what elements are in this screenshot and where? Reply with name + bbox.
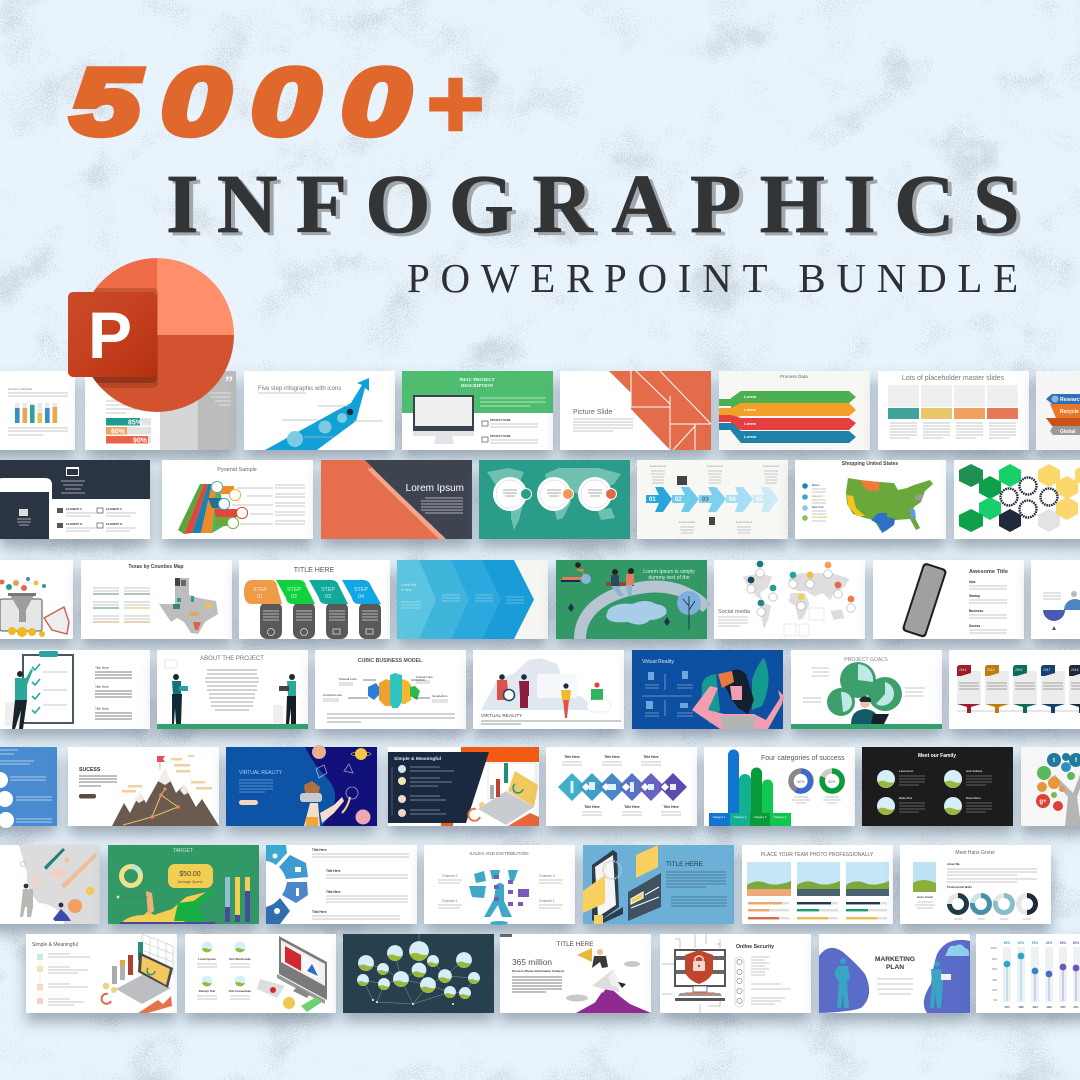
slide: iMac project description: IMAC PROJECT (459, 377, 495, 382)
slide: timeline 2014-2018: 2015 (987, 668, 995, 672)
slide: awesome title phone: Awesome Title (969, 569, 1008, 575)
slide: virtual reality space (226, 745, 377, 826)
slide: four categories of success: Category 2 (734, 815, 747, 819)
slide: process data arrows: Lorem (744, 394, 757, 399)
slide: slider chart percentages: 80% (992, 958, 998, 961)
slide: six diamonds: Title Here (584, 805, 600, 809)
slide: title here steps 01-04: 04 (358, 594, 364, 600)
slide: virtual reality woman (632, 650, 784, 729)
slide: chevron steps 01-05: Lorem Ipsum (679, 520, 696, 524)
slide: target green dashboard (108, 845, 259, 924)
slide: timeline 2014-2018: 2017 (1043, 668, 1051, 672)
slide: meet our family: Lana Anon (899, 769, 914, 773)
slide: social media tree: f (1075, 758, 1078, 764)
slide: Lorem Ipsum split (321, 460, 472, 539)
heading: INFOGRAPHICS: INFOGRAPHICS (166, 158, 1038, 251)
slide: gear segments with titles: Title Here (326, 890, 341, 894)
slide: isometric monitor: Lorem Ipsum (198, 957, 216, 961)
slide: simple and meaningful dark (388, 747, 539, 826)
slide: virtual reality space: VIRTUAL REALITY (239, 770, 283, 776)
slide: clipboard checklist: Title Here (95, 666, 109, 670)
slide: sales and distribution: SALES AND DISTRIBUTION (469, 851, 529, 856)
slide: percentage bars with quote: 85% (128, 420, 143, 426)
slide: social media tree: t (1053, 758, 1055, 764)
slide: slider chart percentages: 100% (991, 947, 998, 950)
slide: about the project: ABOUT THE PROJECT (200, 656, 264, 662)
slide: online security (660, 934, 811, 1013)
slide: title here steps 01-04: 01 (257, 594, 263, 600)
slide: chevron steps 01-05: Lorem Ipsum (650, 464, 667, 468)
slide: isometric monitor (185, 934, 336, 1013)
slide: process data arrows: Lorem (744, 421, 757, 426)
slide: 365 million paper boat: TITLE HERE (557, 941, 593, 948)
slide: bar chart stats (0, 371, 75, 450)
slide: four categories of success (704, 747, 855, 826)
slide: slider chart percentages: 66% (1060, 941, 1066, 945)
slide: gear segments with titles: Title Here (312, 848, 327, 852)
slide: blue chevrons: Great title (401, 583, 417, 587)
slide: meet Hans Gretel (900, 845, 1051, 924)
slide: meet our family (862, 747, 1013, 826)
slide: phone with elements (0, 460, 150, 539)
slide: sales and distribution (424, 845, 575, 925)
slide: title here steps 01-04: STEP (321, 587, 335, 593)
slide: online security: Online Security (736, 944, 774, 950)
heading: 5000+: + (425, 48, 482, 158)
slide: shopping United States map: Shopping United States (842, 461, 898, 467)
slide: meet Hans Gretel: About Me (947, 862, 960, 866)
slide: 365 million paper boat: Process-Phone Information Analysis (512, 969, 565, 973)
slide: six diamonds: Title Here (564, 755, 580, 759)
slide: project goals: PROJECT GOALS (844, 657, 888, 663)
slide: title here steps 01-04: STEP (287, 587, 301, 593)
slide: social media world map (714, 560, 865, 639)
slide: shopping United States map: Miami (812, 483, 820, 487)
slide: social media world map: Social media (718, 609, 751, 615)
slide: gear segments with titles: Title Here (312, 910, 327, 914)
slide: ribbons research recycle: Global (1060, 429, 1076, 435)
slide: marketing plan: PLAN (886, 964, 904, 971)
slide: about the project (157, 650, 308, 729)
slide: awesome title phone (873, 560, 1024, 639)
slide: meet Hans Gretel: Meet Hans Gretel (955, 850, 995, 856)
slide: phone with elements: ELEMENT C (106, 507, 122, 511)
slide: meet Hans Gretel: Hans Gretel (917, 895, 933, 899)
slide: four categories of success: 80% (828, 780, 836, 784)
slide: bank card fingerprint: TITLE HERE (666, 861, 703, 868)
slide: target green dashboard: Average Spend (178, 880, 202, 884)
slide: slider chart percentages: 1998 (1046, 1006, 1052, 1009)
slide: meet Hans Gretel: Professional Skills (947, 885, 972, 889)
slide: process data arrows: Lorem (744, 434, 757, 439)
slide: slider chart percentages: 1970 (1004, 1006, 1010, 1009)
slide: shopping United States map: Houston (812, 494, 823, 498)
slide: picture slide tangram (560, 371, 711, 450)
slide: phone with elements: ELEMENT A (66, 507, 82, 511)
subheading: POWERPOINT BUNDLE: POWERPOINT BUNDLE (407, 255, 1029, 301)
slide: project goals (791, 650, 942, 729)
slide: pyramid sample (162, 460, 313, 539)
slide: virtual reality people (473, 650, 624, 729)
slide: awesome title phone: Sucess (969, 624, 980, 628)
slide: virtual reality people: VIRTUAL REALITY (481, 713, 523, 719)
slide: teal world map circles (479, 460, 630, 539)
slide: clipboard checklist: Title Here (95, 685, 109, 689)
slide: meet our family: Babe Flux (899, 796, 913, 800)
slide: chevron steps 01-05: Lorem Ipsum (707, 464, 724, 468)
slide: chevron steps 01-05: Lorem Ipsum (736, 520, 753, 524)
slide: pyramid sample: Pyramid Sample (217, 467, 257, 473)
slide: 365 million paper boat (500, 934, 651, 1013)
slide: timeline 2014-2018 (949, 650, 1080, 729)
slide: process data arrows: Process Data (780, 374, 808, 379)
slide: slider chart percentages: 1980 (1018, 1006, 1024, 1009)
slide: simple and meaningful isometric: Simple & Meaningful (32, 942, 78, 948)
slide: timeline 2014-2018: 2018 (1071, 668, 1079, 672)
slide: five step arrow: Five step infographic with icons (258, 386, 341, 392)
slide: six diamonds: Title Here (624, 805, 640, 809)
slide: isometric monitor: Dummy Text (199, 989, 215, 993)
logo square: P (88, 298, 132, 372)
slide: isometric monitor: Orci Morimunde (229, 957, 251, 961)
slide: cubic business model: Parietal Lobe (339, 677, 357, 681)
slide: five step arrow (244, 371, 395, 450)
slide: slider chart percentages (976, 934, 1080, 1013)
heading: 5000+: 5000 (71, 49, 410, 154)
slide: cubic business model: Occipital Lobe (323, 693, 342, 697)
slide: chevron steps 01-05: 02 (675, 497, 682, 503)
slide: clipboard checklist: Title Here (95, 707, 109, 711)
slide: title here steps 01-04: TITLE HERE (294, 567, 335, 574)
slide: title here steps 01-04 (239, 560, 390, 639)
slide: slider chart percentages: 80% (1004, 941, 1010, 945)
slide: awesome title phone: Idea (969, 580, 976, 584)
slide: success mountain (68, 747, 219, 826)
slide: four categories of success: Four categories of success (761, 755, 845, 762)
slide: shopping United States map: New York (812, 505, 824, 509)
slide: semicircle diagram (1031, 560, 1080, 639)
slide: slider chart percentages: 40% (992, 979, 998, 982)
slide: slider chart percentages: 2007 (1060, 1006, 1066, 1009)
slide: cubic business model: Cerebellum (432, 694, 448, 698)
slide: success mountain: SUCESS (79, 767, 101, 773)
slide: team photos (742, 845, 893, 924)
slide: sales and distribution: Channel 4 (539, 899, 555, 903)
slide: four categories of success: 60% (797, 780, 805, 784)
slide: six diamonds: Title Here (663, 805, 679, 809)
slide: slider chart percentages: 40% (1046, 941, 1052, 945)
slide: marketing plan: MARKETING (875, 956, 915, 963)
slide: awesome title phone: Startup (969, 594, 980, 598)
slide: title here steps 01-04: 03 (325, 594, 331, 600)
slide: target green dashboard: TARGET (173, 848, 193, 854)
slide: blue with circle icons (0, 747, 57, 828)
slide: placeholder master slides: Lots of placeholder master slides (902, 375, 1005, 382)
slide: social media tree (1021, 747, 1080, 826)
icon: PowerPoint logo (68, 258, 234, 412)
slide: sales and distribution: Channel 1 (442, 899, 458, 903)
slide: team photos: PLACE YOUR TEAM PHOTO PROFESSIONALLY (761, 852, 874, 858)
slide: four categories of success: Category 3 (754, 815, 767, 819)
slide: park illustration: Lorem Ipsum is simply (643, 569, 695, 575)
slide: title here steps 01-04: 02 (291, 594, 297, 600)
slide: blue chevrons: in here (401, 588, 412, 592)
slide: iMac project description: PROJECT NAME (490, 434, 511, 438)
slide: meet our family: Jodi Jubany (966, 769, 983, 773)
slide: cubic business model: Frontal Lobe (416, 675, 433, 679)
slide: meet our family: Dana Dolor (966, 796, 982, 800)
slide: percentage bars with quote (85, 371, 236, 450)
slide: percentage bars with quote: 60% (111, 428, 126, 436)
slide: shopping United States map: Los Angeles (812, 515, 828, 519)
slide: Lorem Ipsum split: Lorem Ipsum (406, 483, 464, 494)
slide: slider chart percentages: 55% (1032, 941, 1038, 945)
slide: simple and meaningful isometric (26, 934, 177, 1013)
slide: sales and distribution: Channel 3 (539, 874, 555, 878)
slide: chevron steps 01-05 (637, 460, 788, 539)
slide: chevron steps 01-05: 01 (649, 497, 656, 503)
slide: ribbons research recycle: Recycle (1060, 409, 1079, 415)
slide: shopping United States map (795, 460, 946, 539)
slide: chevron steps 01-05: Lorem Ipsum (763, 464, 780, 468)
slide: six diamonds: Title Here (604, 755, 620, 759)
slide: 365 million paper boat: 365 million (512, 957, 552, 967)
slide: picture slide tangram: Picture Slide (573, 409, 612, 416)
slide: four categories of success: Category 1 (713, 815, 726, 819)
slide: abstract people and planets (0, 845, 100, 924)
logo square shadow (92, 288, 158, 388)
slide: ribbons research recycle (1036, 371, 1080, 450)
slide: iMac project description (402, 371, 553, 450)
slide: clipboard checklist (0, 650, 150, 729)
slide: phone with elements: ELEMENT B (66, 522, 82, 526)
slide: meet our family: Meet our Family (918, 753, 956, 759)
slide: hexagons with gears (954, 460, 1080, 539)
slide: marketing plan (819, 934, 970, 1013)
slide: funnel and megaphone marketing (0, 560, 73, 639)
slide: social media tree: g+ (1039, 799, 1047, 805)
slide: process data arrows: Lorem (744, 407, 757, 412)
slide: virtual reality woman: Virtual Reality (642, 659, 674, 665)
logo square (68, 292, 157, 377)
slide: six diamonds (546, 747, 697, 826)
slide: network balloons (343, 934, 494, 1013)
slide: percentage bars with quote: ” (225, 374, 233, 391)
slide: cubic business model (315, 650, 466, 729)
slide: placeholder master slides (878, 371, 1029, 450)
slide: title here steps 01-04: STEP (253, 587, 267, 593)
slide: cubic business model: CUBIC BUSINESS MODEL (358, 658, 423, 664)
slide: slider chart percentages: 90% (1018, 941, 1024, 945)
slide: timeline 2014-2018: 2014 (959, 668, 967, 672)
slide: chevron steps 01-05: 04 (729, 497, 736, 503)
slide: chevron steps 01-05: 03 (702, 497, 709, 503)
slide: park illustration (556, 560, 707, 639)
slide: chevron steps 01-05: 05 (756, 497, 763, 503)
slide: slider chart percentages: 60% (992, 968, 998, 971)
slide: simple and meaningful dark: Simple & Meaningful (394, 756, 441, 762)
slide: slider chart percentages: 2011 (1073, 1006, 1079, 1009)
slide: slider chart percentages: 0% (994, 999, 998, 1002)
slide: title here steps 01-04: STEP (354, 587, 368, 593)
slide: isometric monitor: Orci Consectetur (229, 989, 252, 993)
slide: slider chart percentages: 20% (992, 989, 998, 992)
slide: blue chevrons (397, 560, 548, 639)
logo circle quadrants (80, 258, 234, 412)
slide: target green dashboard: $50.00 (179, 871, 201, 878)
slide: four categories of success: Category 4 (774, 815, 787, 819)
slide: gear segments with titles (266, 845, 417, 924)
slide: slider chart percentages: 1994 (1032, 1006, 1038, 1009)
slide: slider chart percentages: 60% (1073, 941, 1079, 945)
slide: Texas by counties map (81, 560, 232, 639)
slide: phone with elements: ELEMENT D (106, 522, 122, 526)
slide: iMac project description: DESCRIPTION (461, 383, 494, 388)
slide: timeline 2014-2018: 2016 (1015, 668, 1023, 672)
slide: iMac project description: PROJECT NAME (490, 418, 511, 422)
slide: park illustration: dummy text of the (648, 575, 690, 581)
slide: bar chart stats: Inventory Stat Data (8, 387, 32, 391)
slide: process data arrows (719, 371, 870, 450)
slide: gear segments with titles: Title Here (326, 869, 341, 873)
slide: sales and distribution: Channel 2 (442, 874, 458, 878)
slide: bank card fingerprint (583, 845, 734, 924)
slide: six diamonds: Title Here (643, 755, 659, 759)
slide: Texas by counties map: Texas by Counties Map (128, 564, 184, 570)
slide: percentage bars with quote: 90% (133, 438, 148, 444)
slide: awesome title phone: Business (969, 609, 983, 613)
